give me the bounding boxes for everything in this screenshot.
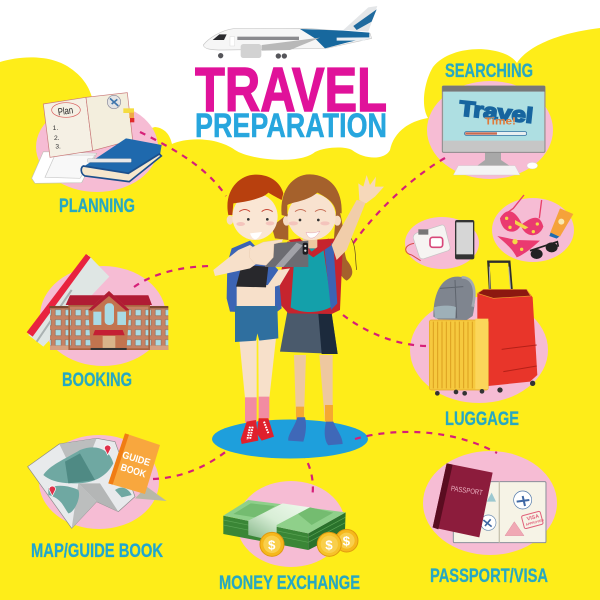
icon: suitcases and backpack: [429, 262, 537, 396]
title: TRAVEL: [195, 56, 387, 125]
icon: computer: [442, 86, 545, 175]
connector: luggage: [343, 315, 426, 346]
icon: map and guide book: [28, 433, 167, 528]
girl left: backpack: [227, 241, 282, 313]
panel: passport and visa: [423, 451, 557, 555]
connector: passport: [355, 432, 497, 453]
icon: planner and book: [32, 93, 162, 183]
label: passport and visa: PASSPORT/VISA: [430, 566, 548, 587]
girl right: skirt: [280, 312, 338, 354]
icon: banknotes and coins: $: [343, 534, 351, 549]
panel: map and guide book: [28, 433, 167, 529]
icon: banknotes and coins: $: [268, 537, 276, 552]
icon: passport and visa: APPROVED: [525, 518, 545, 527]
icon: map and guide book: BOOK: [119, 462, 148, 481]
girl left: head: [227, 175, 283, 240]
panel: money exchange: [223, 481, 358, 567]
icon: tickets and hotel: [27, 254, 168, 350]
label: booking: BOOKING: [62, 370, 132, 391]
icon: passport and visa: [433, 463, 546, 543]
girl right: teal top: [291, 248, 332, 312]
girl right: raised arm: [332, 200, 366, 260]
icon: planner and book: 2.: [54, 135, 60, 142]
girl right: head: [281, 174, 342, 257]
panel: booking: [27, 254, 168, 366]
icon: planner and book: 1.: [53, 125, 58, 132]
girl left: legs: [239, 338, 276, 444]
blue ground ellipse: [212, 420, 368, 458]
connector: booking: [134, 266, 214, 287]
subtitle: PREPARATION: [195, 107, 387, 145]
waving hand: [358, 175, 384, 203]
label: money exchange: MONEY EXCHANGE: [219, 573, 360, 594]
icon: bikini, sunscreen, sunglasses: [497, 195, 573, 259]
icon: banknotes and coins: [223, 500, 358, 556]
panel: planning: [32, 93, 162, 192]
panel: luggage: [410, 262, 548, 403]
long hair, back: [272, 203, 352, 281]
icon: banknotes and coins: $: [325, 537, 333, 552]
icon: airplane: [203, 6, 377, 59]
girl left: shorts: [235, 306, 278, 342]
icon: map and guide book: GUIDE: [121, 450, 152, 469]
girl right: legs: [288, 355, 343, 445]
icon: camera and phone: [406, 220, 474, 261]
phone: [265, 241, 308, 267]
connector: money: [295, 443, 313, 498]
icon: passport and visa: PASSPORT: [450, 484, 484, 497]
label: map and guide book: MAP/GUIDE BOOK: [31, 541, 163, 562]
icon: planner and book: 3.: [55, 144, 61, 151]
girl left: black top: [236, 265, 268, 287]
icon: computer: Travel: [458, 96, 534, 128]
label: luggage: LUGGAGE: [445, 409, 519, 430]
girl left: midriff: [237, 285, 275, 307]
icon: computer: Time!: [485, 117, 516, 128]
label: planning: PLANNING: [59, 196, 135, 217]
hand on phone: [249, 239, 283, 265]
backpack strap: [324, 243, 337, 310]
icon: planner and book: Plan: [57, 105, 74, 118]
connector: planning: [140, 132, 226, 196]
icon: passport and visa: VISA: [526, 514, 540, 523]
girl right: backpack: [279, 238, 343, 314]
girl left: arms: [213, 245, 290, 287]
connector: searching: [352, 158, 445, 245]
panel: swimwear: [492, 195, 574, 262]
connector: map: [153, 450, 228, 479]
label: searching: SEARCHING: [445, 61, 533, 82]
panel: searching: [427, 81, 553, 179]
panel: camera and phone: [405, 217, 479, 269]
figures: two girls taking a selfie: [213, 174, 384, 445]
skirt dark panel: [318, 313, 338, 354]
